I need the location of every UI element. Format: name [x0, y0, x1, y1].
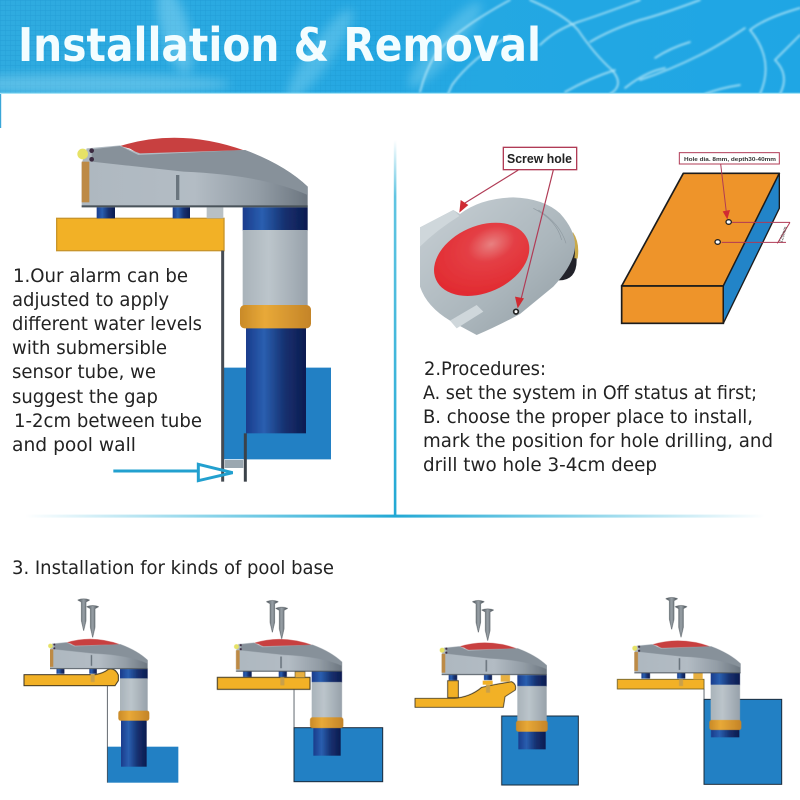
tube behind shell	[547, 237, 577, 280]
text: step 2	[423, 359, 773, 476]
text: step 2: drill two hole 3-4cm deep	[423, 455, 657, 476]
red button	[422, 209, 541, 310]
label: hole size: Hole dia. 8mm, depth30-40mm	[684, 157, 776, 163]
shell flap	[420, 210, 459, 247]
text: step 1: with submersible	[12, 338, 167, 359]
shell	[420, 197, 575, 335]
label: hole spacing: 120mm	[778, 226, 789, 244]
text: step 1: different water levels	[12, 314, 202, 335]
text: step 2: mark the position for hole drilling, and	[423, 431, 773, 452]
block front	[622, 286, 723, 323]
block side	[723, 173, 779, 323]
rim arcs	[533, 208, 566, 243]
arrow head	[723, 210, 730, 219]
tube clearance line	[241, 433, 250, 482]
alarm head	[77, 138, 308, 218]
callout box	[679, 153, 779, 164]
title: Installation & Removal	[18, 18, 541, 72]
pool base option 4	[617, 597, 782, 784]
pool base option 1	[24, 599, 178, 783]
left edge accent	[0, 94, 1, 128]
callout arrows	[463, 170, 553, 303]
horizontal divider	[25, 515, 765, 518]
screw hole dot	[514, 309, 518, 314]
text: step 1: and pool wall	[12, 435, 136, 456]
small post	[207, 207, 223, 218]
arrow heads	[459, 200, 524, 308]
pool base option 3	[415, 600, 578, 785]
gap arrow	[113, 464, 233, 481]
text: step 1	[12, 266, 202, 456]
gap hatch	[225, 460, 243, 468]
diagram: alarm mounted on pool wall	[57, 138, 331, 482]
text: step 1: suggest the gap	[12, 387, 158, 408]
text: step 1: adjusted to apply	[12, 290, 169, 311]
water block	[223, 368, 331, 459]
text: step 2: B. choose the proper place to install,	[423, 407, 753, 428]
text: step 1: sensor tube, we	[12, 362, 156, 383]
heading: step 3: 3. Installation for kinds of pool base	[12, 558, 334, 579]
diagram: drilled block	[622, 153, 790, 323]
label: screw hole: Screw hole	[507, 151, 572, 166]
gap between tube and wall	[224, 459, 245, 480]
text: step 1: 1.Our alarm can be	[13, 266, 188, 287]
hole markers	[721, 164, 790, 243]
text: step 2: A. set the system in Off status at first;	[423, 383, 757, 404]
callout box	[503, 147, 577, 170]
pool wall	[218, 251, 227, 482]
vertical divider	[394, 140, 396, 516]
text: step 1: 1-2cm between tube	[14, 411, 202, 432]
sensor tube	[240, 207, 311, 433]
text: step 2: 2.Procedures:	[424, 359, 546, 380]
mounting plate	[57, 218, 224, 251]
header banner	[0, 0, 800, 94]
block top	[622, 173, 779, 286]
holes	[726, 220, 731, 224]
pool base option 2	[217, 600, 383, 782]
diagram: alarm top view with screw holes	[420, 147, 577, 335]
